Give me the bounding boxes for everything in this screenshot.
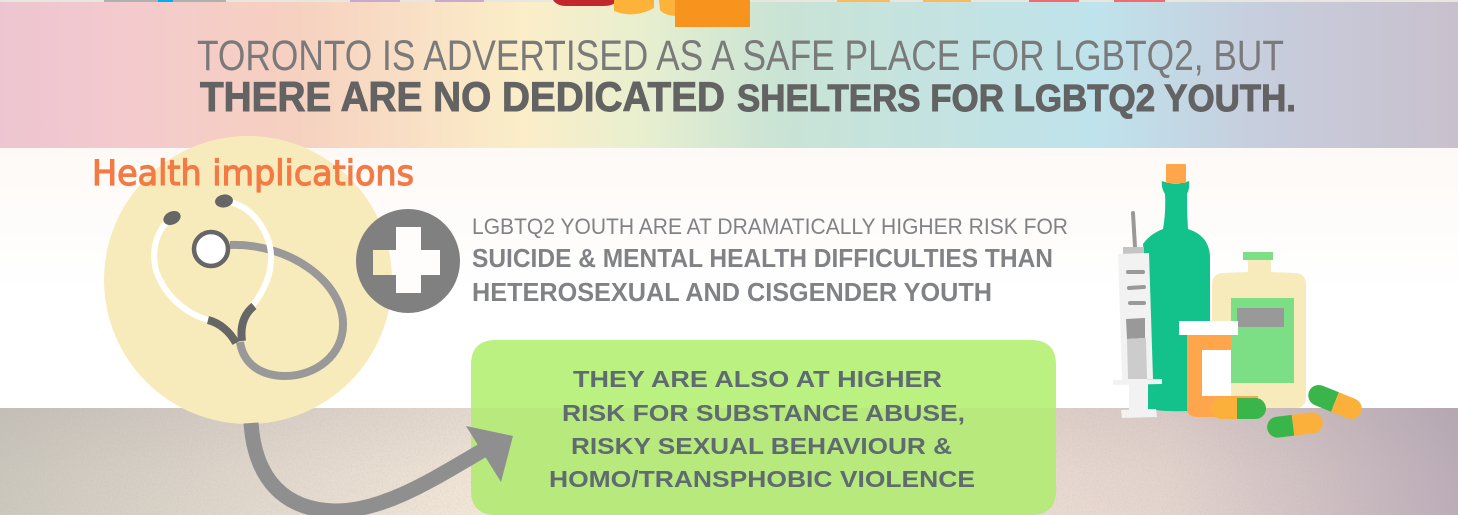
callout text: THEY ARE ALSO AT HIGHER — [573, 366, 942, 392]
heading line 2, second part: SHELTERS FOR LGBTQ2 YOUTH. — [737, 78, 1296, 120]
illustration: medicine bottles and pills — [1113, 164, 1365, 439]
pill 2 — [1266, 411, 1324, 439]
arrow — [251, 423, 513, 511]
heading line 2, first part: THERE ARE NO DEDICATED — [200, 73, 725, 120]
icon: medical cross — [356, 209, 460, 313]
rainbow banner background — [0, 2, 1458, 148]
paragraph — [472, 214, 1068, 307]
callout text: HOMO/TRANSPHOBIC VIOLENCE — [549, 466, 975, 492]
top illustration fragments — [553, 0, 750, 27]
cream circle — [104, 136, 392, 424]
section heading: health implications: Health implications — [92, 154, 414, 194]
callout text: RISK FOR SUBSTANCE ABUSE, — [562, 400, 965, 426]
callout text: RISKY SEXUAL BEHAVIOUR & — [571, 433, 952, 459]
icon: stethoscope — [154, 193, 343, 376]
paragraph line 1: LGBTQ2 YOUTH ARE AT DRAMATICALLY HIGHER RISK FOR — [472, 214, 1068, 239]
paragraph line 2: SUICIDE & MENTAL HEALTH DIFFICULTIES THAN — [472, 243, 1053, 273]
callout text — [549, 366, 975, 492]
pill 1 — [1211, 398, 1266, 419]
heading — [197, 32, 1296, 120]
white middle section — [0, 148, 1458, 409]
syringe — [1113, 213, 1162, 418]
orange pill jar — [1179, 321, 1258, 417]
paragraph line 3: HETEROSEXUAL AND CISGENDER YOUTH — [472, 277, 992, 307]
background: top strip — [0, 0, 1458, 3]
pill 3 — [1305, 382, 1365, 422]
green bottle — [1143, 164, 1210, 411]
cream bottle — [1212, 252, 1306, 408]
textured lower band — [0, 408, 1458, 515]
callout: green box — [471, 340, 1056, 515]
